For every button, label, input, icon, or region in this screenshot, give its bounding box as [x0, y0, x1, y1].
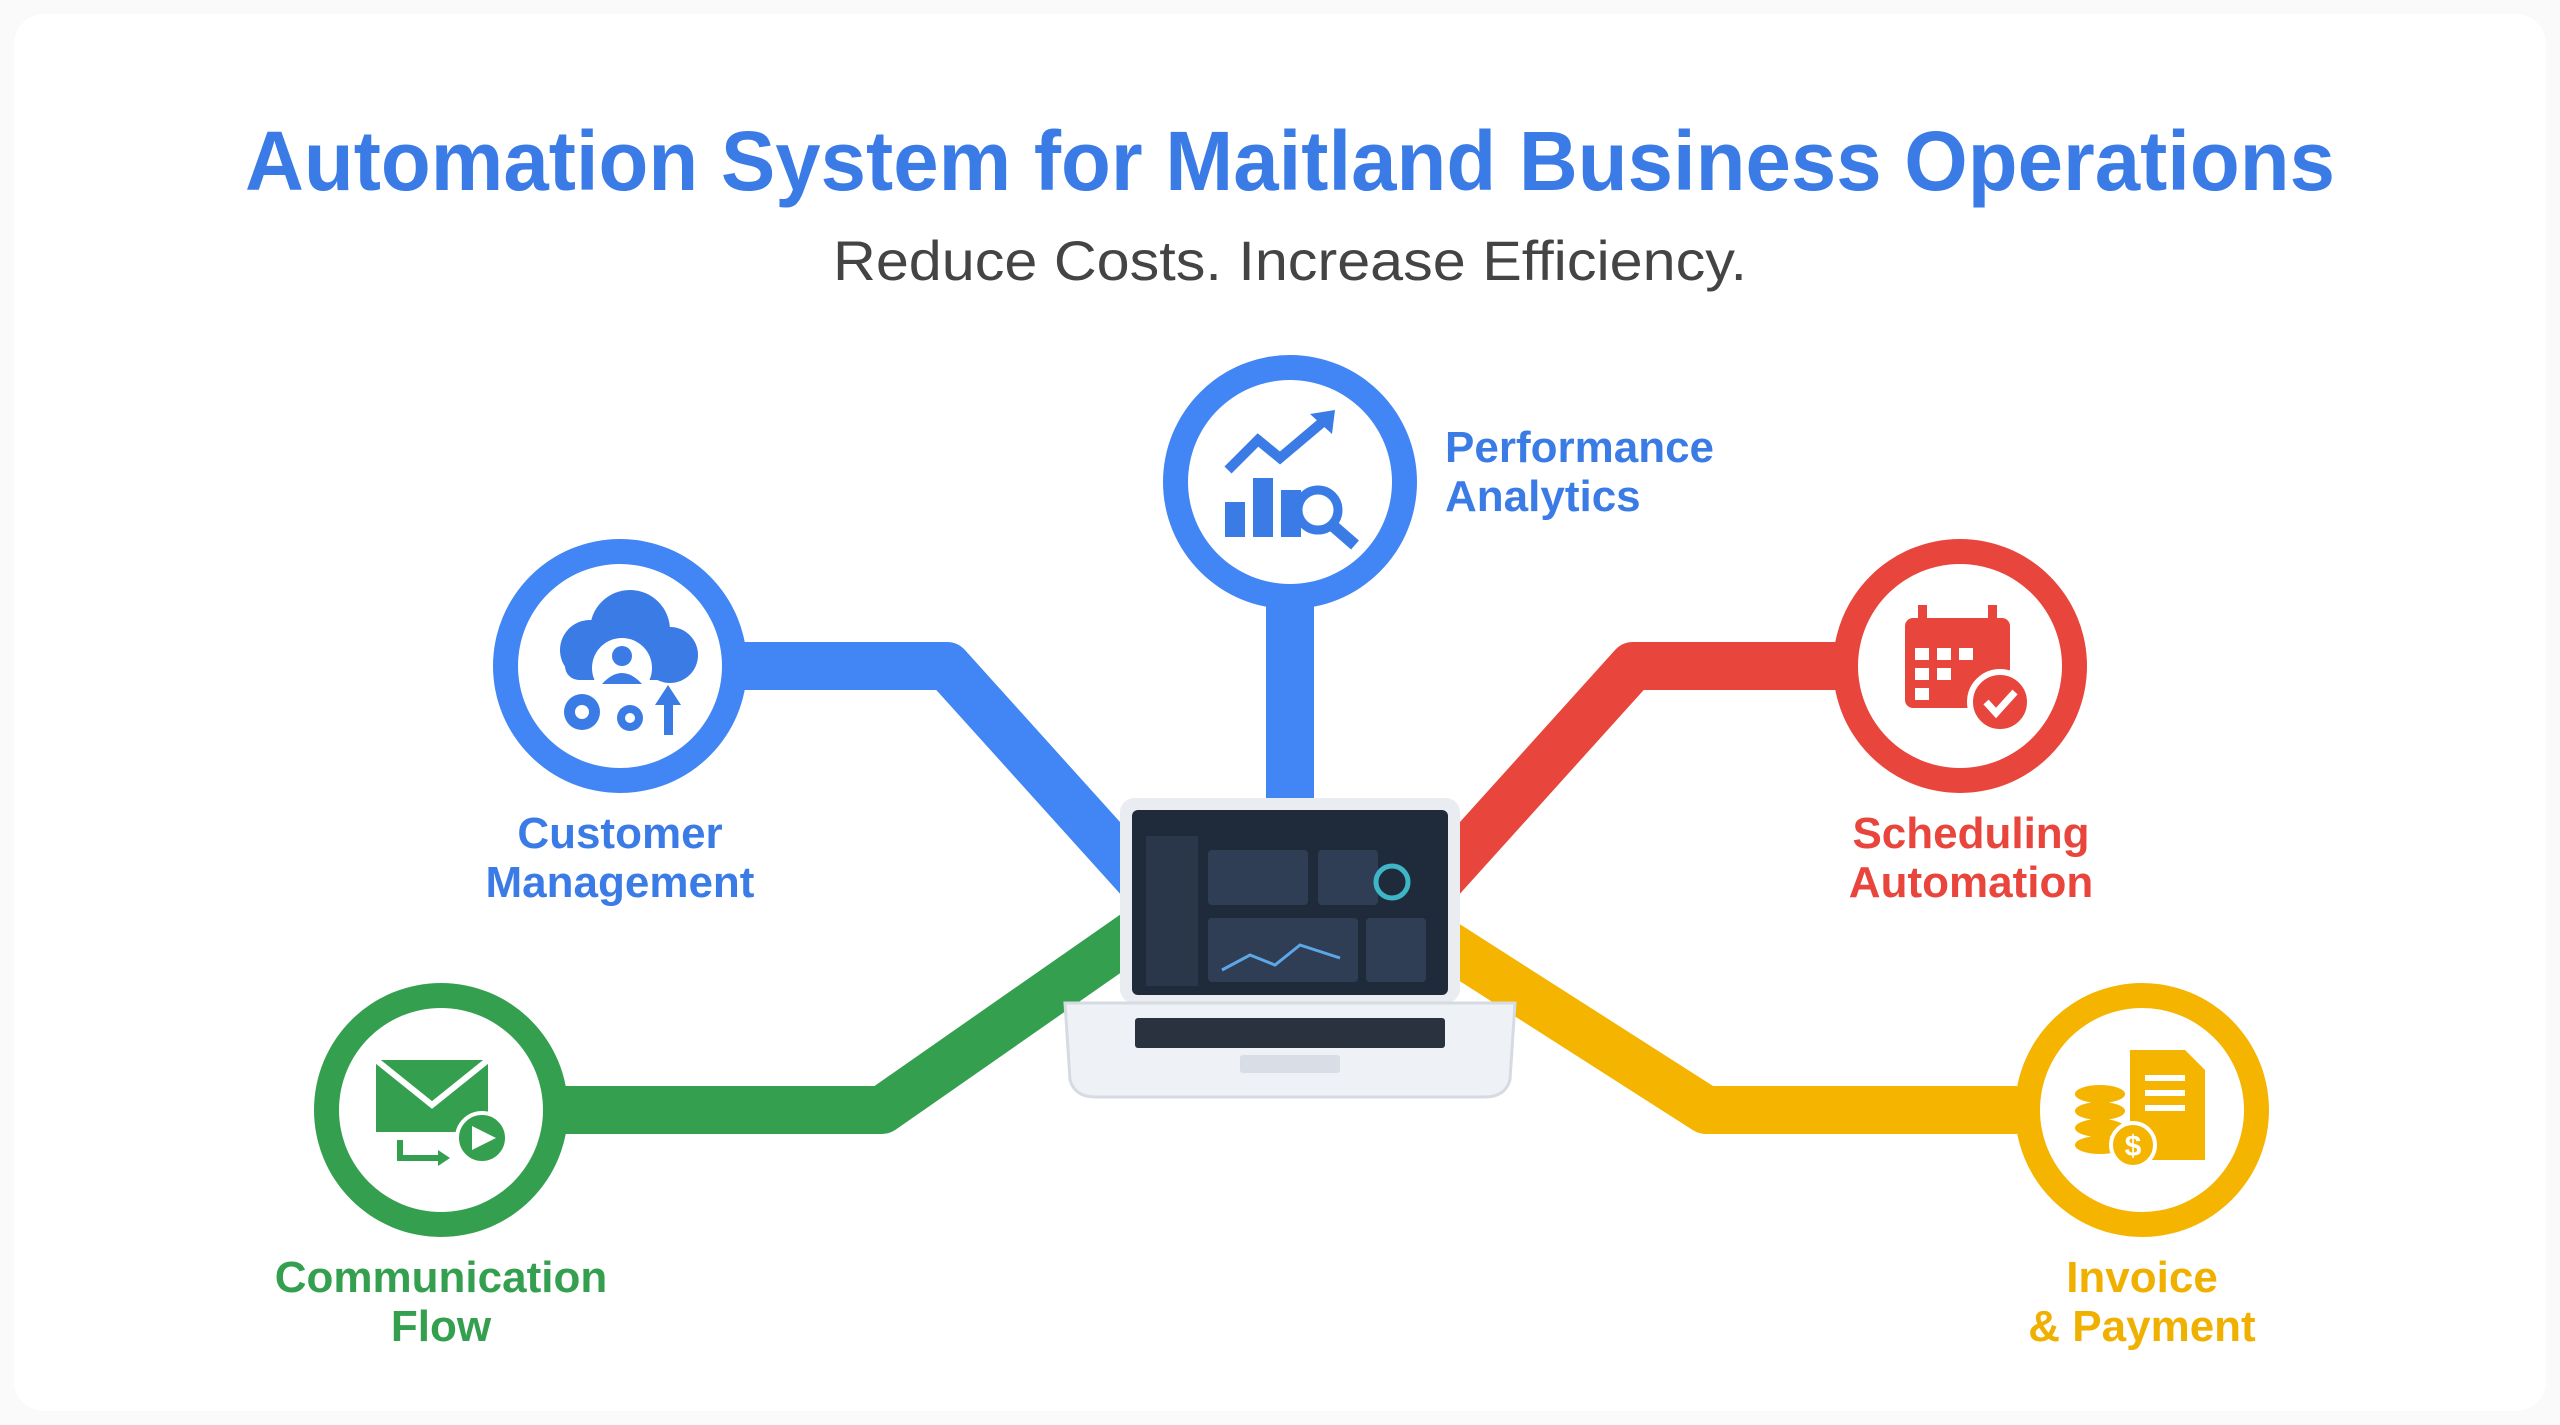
- icon: calendar check: [1905, 605, 2030, 732]
- label: invoice payment: & Payment: [2028, 1302, 2256, 1351]
- label: invoice payment: Invoice: [2066, 1253, 2218, 1302]
- title: Automation System for Maitland Business Operations: [245, 114, 2335, 208]
- connector: red scheduling: [1440, 666, 1837, 880]
- node: invoice payment: [2015, 983, 2269, 1237]
- connector: yellow invoice: [1440, 940, 2017, 1110]
- icon: coins invoice: [2075, 1050, 2205, 1167]
- icon: coins invoice: $: [2125, 1130, 2142, 1163]
- label: performance analytics: Analytics: [1445, 472, 1641, 521]
- label: scheduling automation: Automation: [1849, 858, 2093, 907]
- node: communication flow: [314, 983, 568, 1237]
- subtitle: Reduce Costs. Increase Efficiency.: [833, 229, 1747, 292]
- node: customer management: [493, 539, 747, 793]
- icon: cloud user gears: [560, 590, 698, 735]
- connector: green communication: [563, 930, 1140, 1110]
- connector: blue customer: [743, 666, 1140, 880]
- connector: blue performance: [1266, 600, 1314, 830]
- label: communication flow: Communication: [275, 1253, 607, 1302]
- icon: envelope send: [376, 1060, 507, 1166]
- label: communication flow: Flow: [391, 1302, 492, 1351]
- node: scheduling automation: [1833, 539, 2087, 793]
- icon: chart magnifier: [1225, 410, 1355, 545]
- label: customer management: Customer: [517, 809, 723, 858]
- label: performance analytics: Performance: [1445, 423, 1714, 472]
- node: performance analytics: [1163, 355, 1417, 609]
- label: scheduling automation: Scheduling: [1852, 809, 2090, 858]
- laptop: [1065, 798, 1515, 1097]
- label: customer management: Management: [486, 858, 755, 907]
